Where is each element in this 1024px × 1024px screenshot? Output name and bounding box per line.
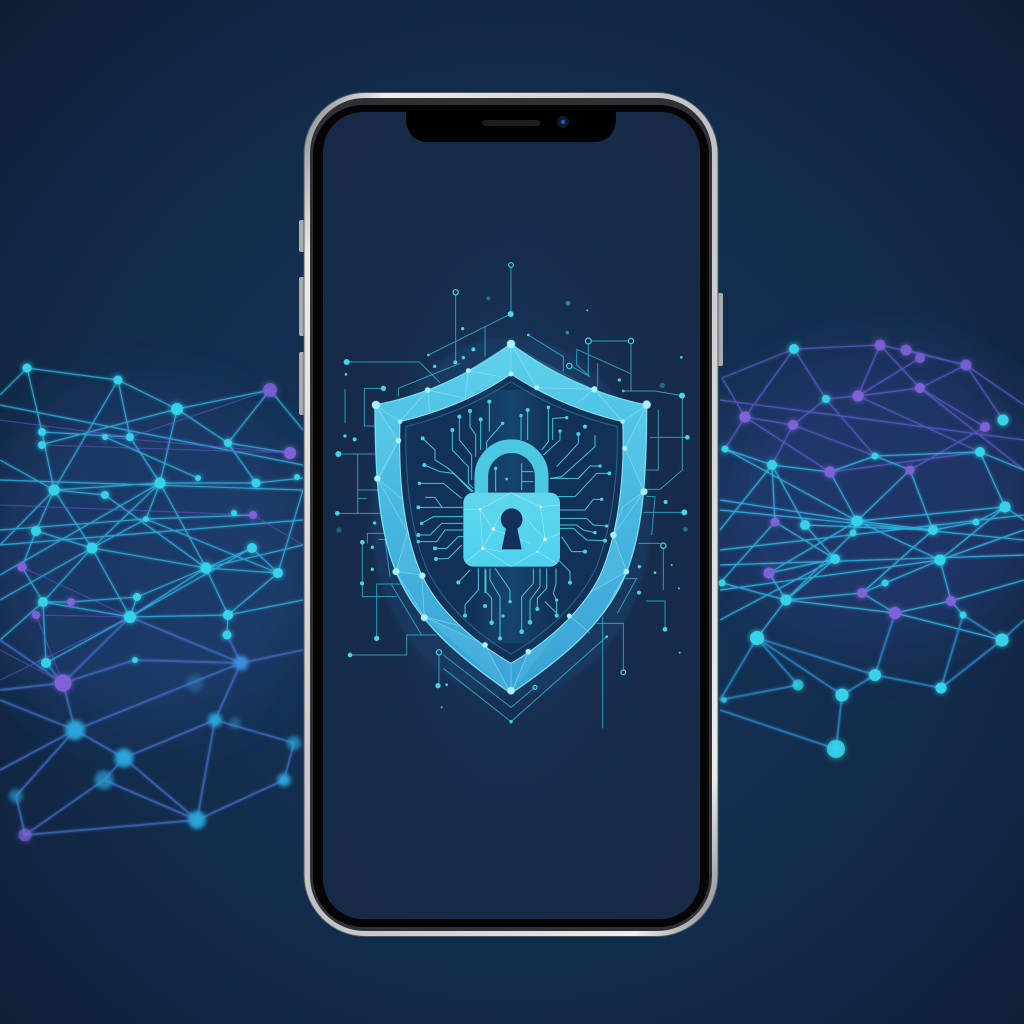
network: left xyxy=(0,364,303,842)
padlock xyxy=(463,446,560,567)
shield inner field xyxy=(400,374,623,663)
padlock shackle xyxy=(481,446,542,495)
network lines: right middle xyxy=(720,449,1024,640)
circuit traces inside shield xyxy=(418,402,609,638)
shield centre band xyxy=(470,390,552,643)
speaker xyxy=(482,120,540,126)
padlock body xyxy=(463,493,560,567)
network lines: left upper xyxy=(0,368,303,663)
network nodes: right, purple xyxy=(740,340,990,619)
circuit trace end nodes xyxy=(416,400,611,640)
notch xyxy=(406,110,616,142)
shield vertices xyxy=(372,340,651,694)
shield inset line xyxy=(406,382,617,654)
network lines: right lower xyxy=(720,613,1024,749)
network haze xyxy=(0,350,1024,730)
shield xyxy=(372,340,651,694)
emblem glow xyxy=(371,337,651,697)
network nodes: right, cyan xyxy=(718,344,1010,758)
padlock keyhole xyxy=(501,508,523,549)
camera xyxy=(557,116,569,128)
network: right xyxy=(718,340,1024,758)
phone xyxy=(299,92,723,937)
outer nodes and rings xyxy=(335,296,690,723)
network lines: left purple xyxy=(0,390,303,683)
network lines: right upper xyxy=(720,345,1024,472)
network nodes: left, purple xyxy=(18,383,296,842)
phone frame xyxy=(304,92,718,937)
network nodes: left, soft blue xyxy=(9,656,301,829)
network lines: left lower xyxy=(0,617,303,835)
circuit traces outside shield xyxy=(337,267,687,728)
network nodes: left, cyan xyxy=(22,364,300,668)
shield facets xyxy=(375,344,647,693)
shield ring xyxy=(375,344,647,693)
padlock facets xyxy=(463,493,560,567)
phone side buttons xyxy=(299,220,723,415)
phone screen xyxy=(323,112,700,919)
security emblem xyxy=(335,263,690,728)
